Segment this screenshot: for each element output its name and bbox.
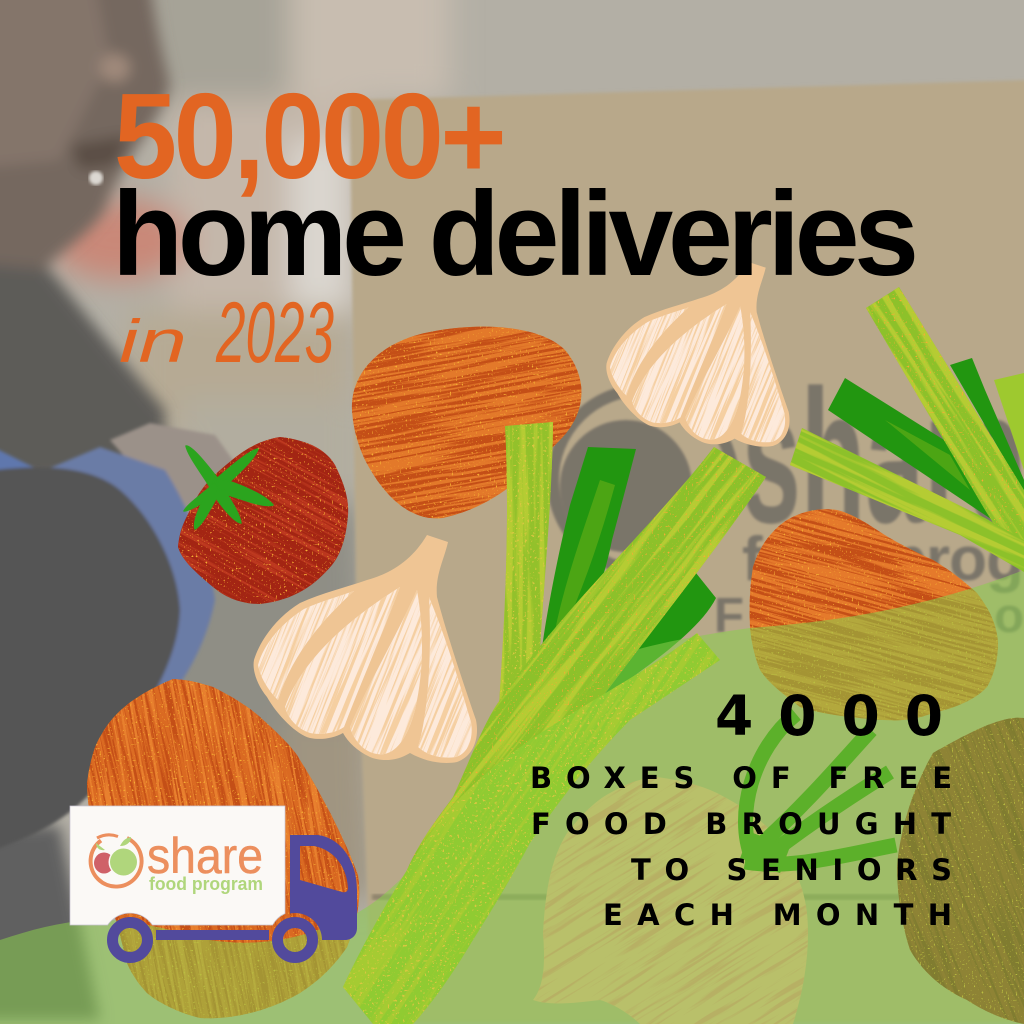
right leek — [785, 280, 1024, 580]
statistic description: FOOD BROUGHT — [531, 807, 951, 841]
large leek — [340, 420, 770, 1024]
lower light leaf — [790, 428, 1024, 572]
pale upright leek leaf — [499, 422, 553, 702]
truck axle — [156, 930, 269, 940]
right root — [890, 710, 1024, 1024]
title: 50,000+: 50,000+ — [114, 67, 503, 204]
front wheel — [278, 922, 312, 958]
delivery truck with logo — [70, 806, 357, 958]
statistic: 4000 boxes — [530, 684, 952, 932]
right carrot — [750, 509, 998, 720]
bottom-left carrot — [80, 670, 370, 1024]
vegetables behind the green wave — [80, 500, 1024, 1024]
truck box panel — [70, 806, 285, 925]
small green sprigs — [745, 714, 896, 864]
pale garlic bulb bottom — [525, 770, 815, 1024]
statistic description: EACH MONTH — [603, 898, 952, 932]
middle garlic bulb — [254, 535, 477, 763]
dark leaves — [828, 378, 994, 521]
wide leek leaf and stem — [400, 440, 770, 885]
statistic description — [530, 761, 952, 932]
top carrot — [352, 326, 582, 518]
tomato — [178, 437, 348, 604]
upper light leaf — [866, 287, 1024, 540]
number 4000: 4000 — [715, 684, 943, 748]
faded share food program logo printed on the box — [553, 351, 1024, 643]
rear wheel — [112, 922, 148, 958]
pale far right leaf — [994, 373, 1024, 470]
handwritten subtitle: in 2023: in — [119, 308, 187, 375]
top garlic bulb — [606, 262, 790, 447]
tomato stem — [184, 446, 273, 529]
logo wordmark food program: food program — [149, 874, 263, 894]
dark leek leaf — [537, 447, 636, 692]
statistic description: TO SENIORS — [631, 853, 952, 887]
title: home deliveries: home deliveries — [112, 167, 919, 301]
faded share food program logo printed on the box: Food Pro — [714, 589, 1024, 643]
logo wordmark share: share — [147, 828, 263, 884]
handwritten subtitle: in 2023 — [119, 285, 334, 381]
small dark leek leaf — [600, 573, 716, 700]
logo icon — [91, 835, 142, 887]
handwritten subtitle: in 2023: 2023 — [215, 285, 334, 381]
statistic description: BOXES OF FREE — [530, 761, 952, 795]
lower bright leek stem — [340, 625, 725, 1024]
truck cab — [290, 835, 357, 940]
green wave overlay — [0, 570, 1024, 1024]
faded share food program logo printed on the box: food prog — [742, 525, 1024, 594]
